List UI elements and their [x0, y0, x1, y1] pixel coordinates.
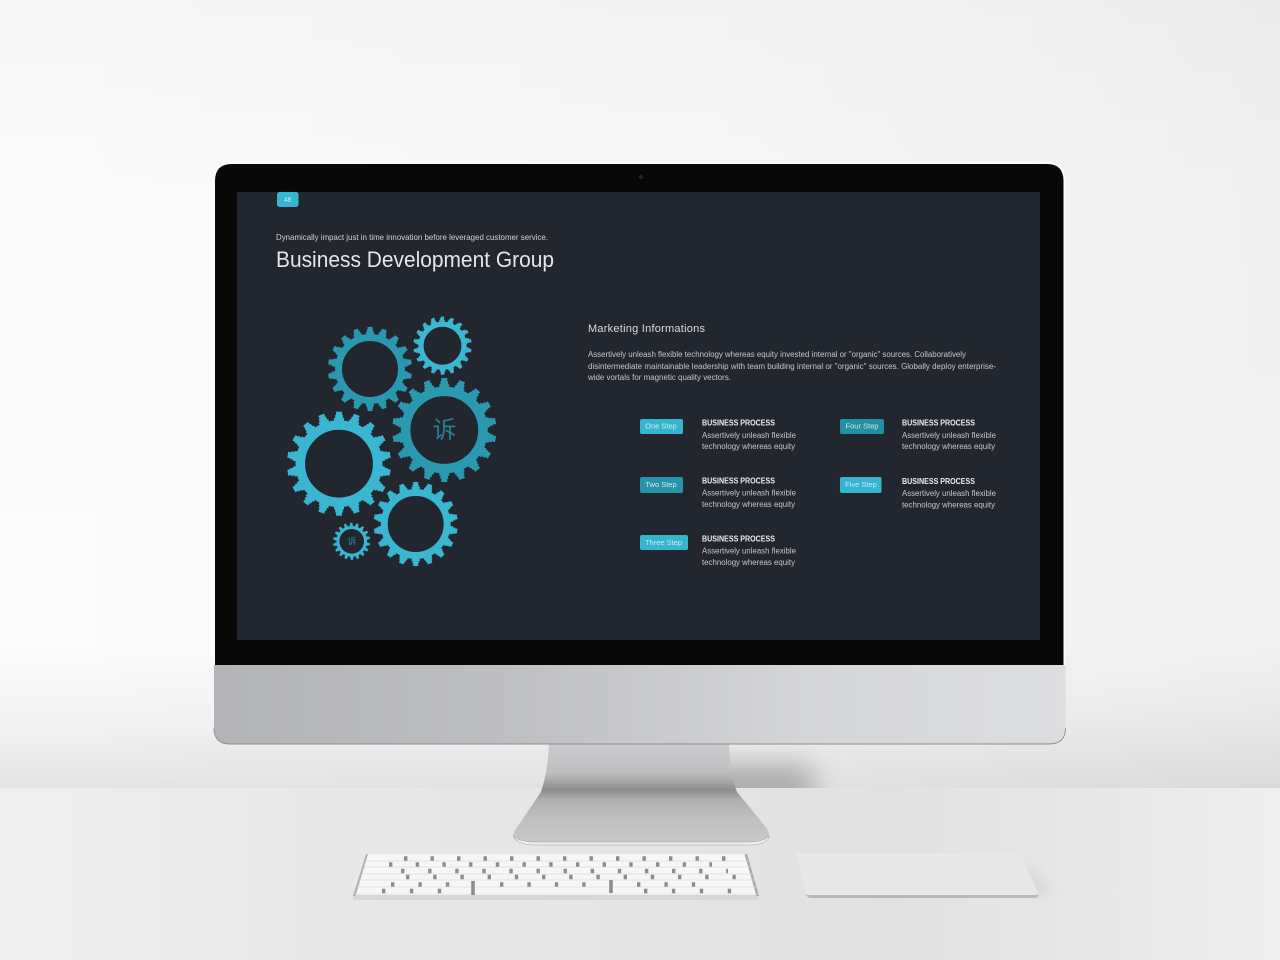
stand shadow on wall — [730, 750, 825, 788]
gear: small with character: 诉 — [347, 536, 357, 546]
paragraph: Assertively unleash flexible technology whereas equity invested internal or "organic" sources. Collaboratively — [588, 350, 966, 359]
step 5: BUSINESS PROCESS — [902, 477, 976, 486]
subtitle: Dynamically impact just in time innovation before leveraged customer service. — [276, 232, 548, 242]
step 2: BUSINESS PROCESS — [702, 476, 776, 486]
step 2: technology whereas equity — [702, 500, 795, 509]
step 5: technology whereas equity — [902, 500, 995, 510]
step 3 — [640, 534, 797, 567]
step 1: Assertively unleash flexible — [702, 431, 797, 440]
icon: webcam — [639, 175, 643, 179]
step 3: technology whereas equity — [702, 558, 795, 567]
gear: bottom — [375, 483, 457, 565]
gear: right with character: 诉 — [432, 417, 456, 444]
step 3: BUSINESS PROCESS — [702, 534, 776, 544]
step 4: Assertively unleash flexible — [902, 431, 997, 440]
paragraph: disintermediate maintainable leadership with team building internal or "organic" sources. Globally deploy enterprise- — [588, 362, 996, 371]
title: Business Development Group — [276, 247, 554, 272]
step 3: Three Step — [645, 538, 682, 547]
monitor stand — [513, 744, 770, 845]
step 1: One Step — [645, 422, 677, 430]
gear: small with character — [334, 524, 369, 559]
paragraph: wide vortals for magnetic quality vectors. — [587, 373, 731, 382]
gear: large left — [289, 413, 389, 514]
screen slide — [237, 192, 1040, 640]
step 2: Assertively unleash flexible — [702, 488, 797, 498]
step 1: technology whereas equity — [702, 442, 795, 451]
trackpad — [797, 853, 1052, 898]
step 5: Assertively unleash flexible — [902, 489, 997, 498]
step 4: Four Step — [846, 422, 878, 430]
page number badge — [277, 192, 298, 207]
step 4 — [840, 418, 997, 451]
step 5: Five Step — [845, 480, 877, 489]
monitor body — [214, 162, 1066, 744]
gear: top right — [414, 318, 471, 374]
gear cluster — [289, 318, 495, 565]
step 2 — [640, 476, 797, 509]
gear: top left — [329, 328, 411, 410]
step 1 — [640, 418, 797, 451]
page number badge: 48 — [284, 197, 291, 204]
step 1: BUSINESS PROCESS — [702, 418, 776, 428]
step 5 — [840, 477, 997, 510]
step 3: Assertively unleash flexible — [702, 546, 797, 556]
step 2: Two Step — [645, 480, 677, 489]
step 4: technology whereas equity — [902, 442, 995, 451]
step 4: BUSINESS PROCESS — [902, 418, 976, 428]
keyboard — [353, 854, 759, 900]
background: desk — [0, 788, 1280, 960]
section heading: Marketing Informations — [588, 323, 706, 335]
paragraph — [587, 350, 996, 382]
gear: right with character — [394, 380, 495, 480]
